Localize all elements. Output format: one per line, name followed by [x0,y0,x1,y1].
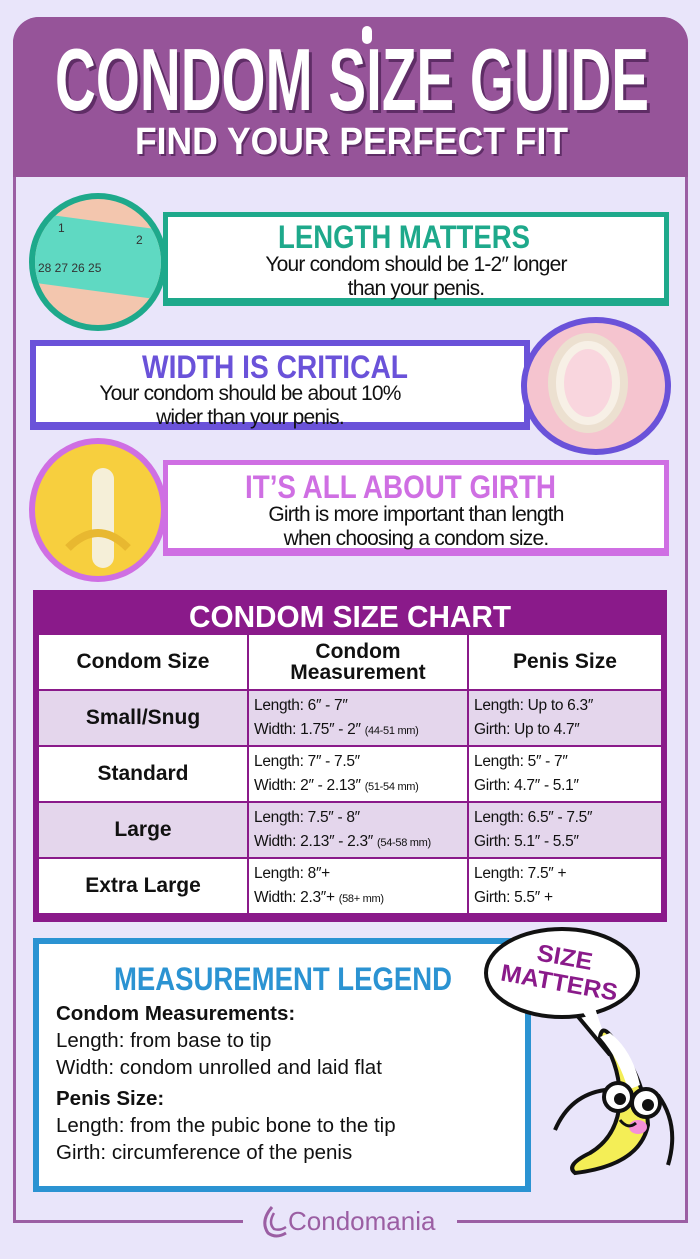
table: Width: 1.75″ - 2″ (44-51 mm) [254,720,419,738]
table: Length: 6″ - 7″ [254,696,348,714]
measurement legend: Girth: circumference of the penis [56,1141,352,1164]
table: Length: Up to 6.3″ [474,697,593,714]
icon: ruler circle: 2 [136,233,143,247]
measurement legend: Width: condom unrolled and laid flat [56,1056,382,1079]
table: Small/Snug [86,706,200,729]
table: Width: 2″ - 2.13″ (51-54 mm) [254,776,419,794]
title: FIND YOUR PERFECT FIT [137,123,570,165]
measurement legend: Length: from the pubic bone to the tip [56,1114,396,1137]
card: length matters [163,212,669,306]
footer line right [457,1220,688,1223]
card: length matters: Your condom should be 1-2″ longer [265,253,567,276]
table: Length: 7.5″ + [474,865,566,882]
card: width is critical: Your condom should be about 10% [99,382,401,405]
table: Condom [315,640,401,663]
measurement legend: Length: from base to tip [56,1029,271,1052]
card: girth: when choosing a condom size. [284,527,548,550]
table: Extra Large [85,874,201,897]
footer line left [13,1220,243,1223]
speech bubble + banana mascot: MATTERS [499,960,620,1007]
card: girth: Girth is more important than length [268,503,564,526]
table: Width: 2.3″+ (58+ mm) [254,888,384,906]
table: Girth: Up to 4.7″ [474,721,580,738]
measurement legend: Condom Measurements: [56,1002,295,1025]
speech bubble + banana mascot [484,927,674,1176]
logo: Condomania: Condomania [288,1206,435,1236]
table: Large [114,818,172,841]
icon: condom circle [521,317,671,455]
measurement legend: Penis Size: [56,1087,164,1110]
chart title: CONDOM SIZE CHART [189,599,511,634]
table: Length: 7″ - 7.5″ [254,752,360,770]
icon: banana circle [29,438,163,582]
icon: ruler circle: 1 [58,221,65,235]
table: Condom Size [76,650,210,673]
table: Length: 5″ - 7″ [474,753,568,770]
card: girth [163,460,669,556]
table: Girth: 4.7″ - 5.1″ [474,777,579,794]
table: Length: 8″+ [254,864,330,882]
icon: ruler circle [29,193,163,331]
table [37,633,663,915]
table: Standard [97,762,188,785]
icon: ruler circle: 28 27 26 25 [38,261,102,275]
card: length matters: than your penis. [348,277,484,300]
title [55,26,652,165]
title: FIND YOUR PERFECT FIT [135,121,568,163]
table: Penis Size [513,650,617,673]
card: width is critical [30,340,530,430]
measurement legend [33,938,531,1192]
card: width is critical: wider than your penis. [156,406,344,429]
table: Length: 6.5″ - 7.5″ [474,809,592,826]
table: Girth: 5.1″ - 5.5″ [474,833,579,850]
speech bubble + banana mascot: SIZE [535,940,595,976]
header band [13,17,688,177]
table: Measurement [290,661,426,684]
legend title: MEASUREMENT LEGEND [114,961,452,996]
size chart [33,590,667,922]
table: Girth: 5.5″ + [474,889,553,906]
table: Width: 2.13″ - 2.3″ (54-58 mm) [254,832,431,850]
table: Length: 7.5″ - 8″ [254,808,360,826]
